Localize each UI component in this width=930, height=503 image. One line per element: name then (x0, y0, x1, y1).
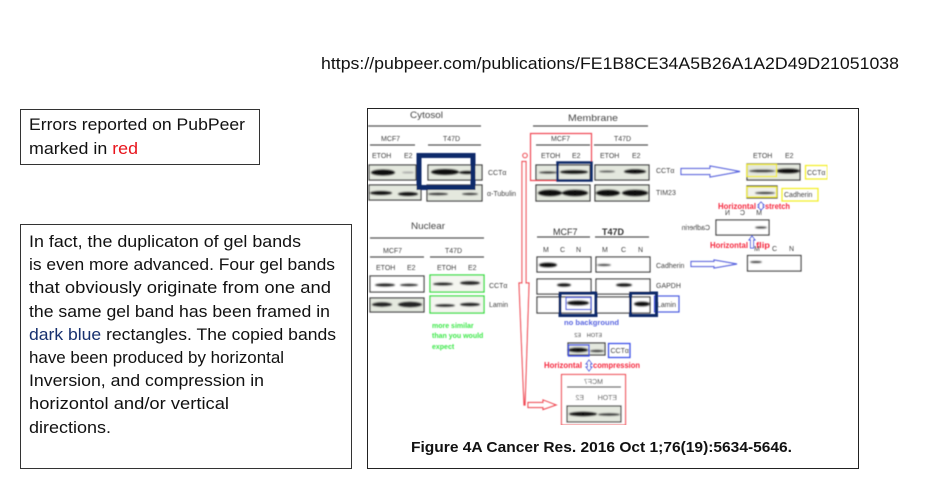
annotation: more similar: more similar (432, 323, 474, 330)
panel: flipped MCF7 blot (567, 379, 621, 422)
panel: nuclear blots: ETOH (376, 265, 395, 272)
panel: membrane fractions blots: MCF7 (553, 227, 578, 237)
arrow: blue to cadherin (691, 260, 737, 268)
panel: flipped MCF7 blot: ETOH (598, 395, 617, 402)
labels: yellow framed (784, 170, 825, 199)
panel: cropped CCTa and cadherin blots: E2 (785, 153, 794, 160)
panel: membrane blots: ETOH (600, 153, 619, 160)
panel: nuclear blots: MCF7 (383, 248, 402, 255)
text block: duplication explanation: horizontol and/or vertical (29, 395, 229, 413)
panel: source cadherin blot: C (772, 246, 777, 253)
labels: yellow framed: Cadherin (784, 192, 813, 199)
panel: mirrored cadherin blot: C (740, 210, 745, 217)
panel: nuclear blots: T47D (445, 248, 462, 255)
panel: cytosol blots: T47D (443, 136, 460, 143)
panel: flipped MCF7 blot: E2 (575, 395, 584, 402)
annotation: horizontal stretch: Horizontal (718, 202, 756, 211)
panel: nuclear blots: Lamin (489, 302, 508, 309)
panel: compressed mirrored blot: ETOH (587, 333, 602, 339)
panel: source cadherin blot: N (789, 246, 794, 253)
panel: membrane blots: T47D (614, 136, 631, 143)
panel: membrane blots: TIM23 (656, 190, 676, 197)
panel: membrane blots (533, 113, 676, 201)
text block: duplication explanation: is even more advanced. Four gel bands (29, 256, 335, 274)
figure content (368, 110, 828, 425)
panel: membrane fractions blots: C (560, 247, 565, 254)
text block: duplication explanation: that obviously originate from one and (29, 279, 331, 297)
red frame: membrane MCF7 (530, 134, 592, 180)
arrow: red to flipped blot (528, 400, 556, 410)
panel: cropped CCTa and cadherin blots: ETOH (753, 153, 772, 160)
panel: cropped CCTa and cadherin blots (747, 153, 800, 198)
panel: nuclear blots: ETOH (437, 265, 456, 272)
panel: figure frame (368, 108, 858, 468)
annotation: horizontal stretch (718, 202, 790, 211)
caption: Figure 4A Cancer Res. 2016 Oct 1;76(19):5634-5646. (411, 439, 792, 456)
panel: nuclear blots: E2 (468, 265, 477, 272)
panel: cytosol blots: E2 (465, 153, 474, 160)
red frame: flipped MCF7 source (562, 374, 626, 425)
panel: membrane fractions blots (537, 227, 685, 313)
text block: duplication explanation: directions. (29, 419, 111, 437)
panel: compressed mirrored blot (568, 333, 605, 355)
panel: cytosol blots: CCTα (488, 170, 506, 177)
labels: yellow framed: CCTα (807, 170, 825, 177)
panel: cytosol blots (368, 110, 516, 201)
panel: nuclear blots: E2 (407, 265, 416, 272)
text block: duplication explanation: In fact, the duplicaton of gel bands (29, 233, 301, 251)
panel: cytosol blots: Cytosol (410, 110, 443, 121)
annotation: more similar (432, 323, 483, 351)
panel: source cadherin blot: M (754, 246, 760, 253)
panel: membrane blots: CCTα (656, 168, 674, 175)
panel: membrane blots: E2 (572, 153, 581, 160)
panel: membrane fractions blots: Lamin (657, 302, 676, 309)
panel: nuclear blots: CCTα (489, 283, 507, 290)
text block: duplication explanation: have been produced by horizontal (29, 349, 284, 367)
text block: duplication explanation (20, 224, 352, 468)
blue frames: compressed CCTa (568, 344, 630, 358)
panel: flipped MCF7 blot: MCF7 (584, 379, 603, 386)
panel: mirrored cadherin blot: N (725, 210, 730, 217)
arrow: blue to CCTa crop (681, 166, 740, 177)
yellow frames: CCTa and cadherin (747, 164, 828, 201)
panel: membrane blots: E2 (632, 153, 641, 160)
panel: mirrored cadherin blot: Cadherin (681, 225, 710, 232)
annotation: horizontal flip (710, 236, 770, 250)
panel: membrane fractions blots: T47D (602, 227, 625, 237)
annotation: horizontal compression (544, 360, 640, 371)
dark blue frames: lamin bands (560, 293, 656, 316)
panel: membrane fractions blots: M (602, 247, 608, 254)
blue frames: lamin (566, 296, 679, 312)
annotation: no background: no background (564, 320, 619, 327)
label: compressed CCTa: CCTα (610, 348, 629, 355)
annotation: more similar: than you would (432, 333, 483, 340)
panel: cytosol blots: α-Tubulin (487, 191, 516, 198)
panel: membrane fractions blots: GAPDH (656, 283, 681, 290)
dark blue frame: cytosol CCTa (419, 156, 473, 188)
annotation: horizontal compression: compression (593, 361, 640, 370)
annotation: horizontal compression: Horizontal (544, 361, 582, 370)
text block: duplication explanation: dark blue rectangles. The copied bands (29, 326, 336, 344)
annotation: horizontal stretch: stretch (765, 202, 790, 211)
panel: cytosol blots: ETOH (372, 153, 391, 160)
callout: errors reported: marked in red (29, 140, 138, 158)
panel: compressed mirrored blot: E2 (574, 333, 581, 339)
arrow: long red (519, 153, 529, 405)
panel: cytosol blots: MCF7 (381, 136, 400, 143)
panel: membrane fractions blots: N (638, 247, 643, 254)
annotation: horizontal flip: Horizontal (710, 241, 748, 250)
text block: duplication explanation: Inversion, and compression in (29, 372, 264, 390)
panel: source cadherin blot (748, 246, 801, 271)
annotation: horizontal flip: flip (756, 241, 770, 250)
panel: membrane fractions blots: C (621, 247, 626, 254)
panel: cytosol blots: E2 (404, 153, 413, 160)
panel: membrane fractions blots: N (576, 247, 581, 254)
text block: duplication explanation: the same gel band has been framed in (29, 303, 330, 321)
panel: membrane blots: Membrane (568, 113, 618, 124)
source url: https://pubpeer.com/publications/FE1B8CE34A5B26A1A2D49D21051038 (321, 55, 899, 73)
panel: membrane fractions blots: Cadherin (656, 263, 685, 270)
panel: membrane fractions blots: M (543, 247, 549, 254)
panel: mirrored cadherin blot: M (756, 210, 762, 217)
dark blue frame: membrane E2 (558, 162, 592, 180)
callout: errors reported (20, 110, 260, 164)
panel: nuclear blots (370, 221, 508, 313)
panel: membrane blots: ETOH (541, 153, 560, 160)
panel: mirrored cadherin blot (681, 210, 769, 235)
panel: membrane blots: MCF7 (551, 136, 570, 143)
callout: errors reported: Errors reported on PubPeer (29, 116, 246, 134)
panel: nuclear blots: Nuclear (411, 221, 445, 232)
panel: cytosol blots: ETOH (433, 153, 452, 160)
annotation: more similar: expect (432, 344, 455, 351)
